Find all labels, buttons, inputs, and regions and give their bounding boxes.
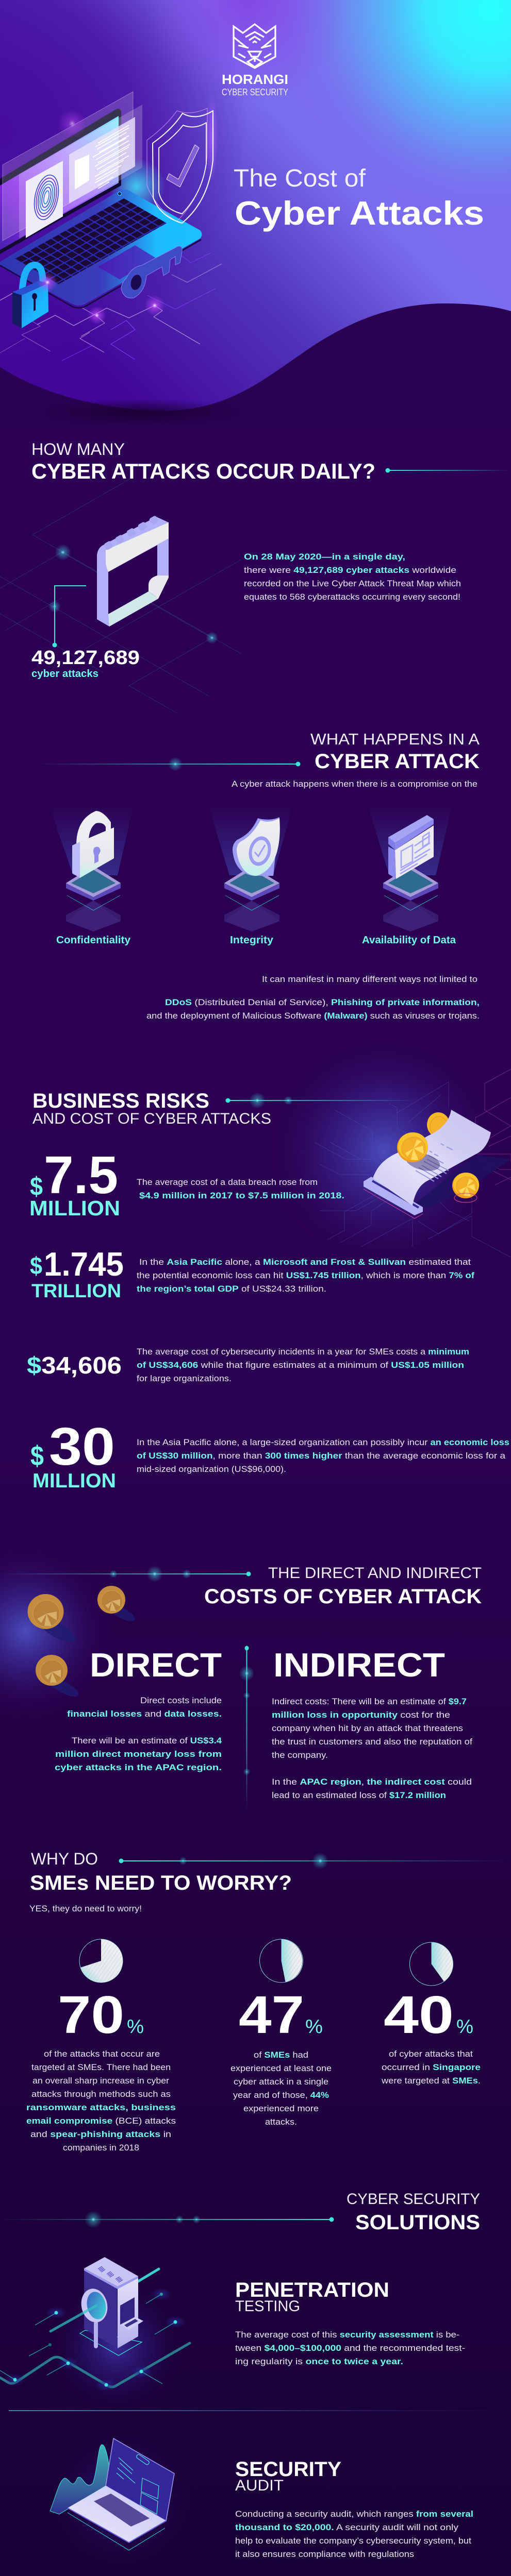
panel: why SMEs need to worry	[26, 1850, 511, 2153]
text block: of the attacks that occur are	[44, 2049, 160, 2059]
monitor	[120, 2297, 135, 2325]
text block: equates to 568 cyberattacks occurring every second!	[244, 592, 460, 602]
text block: of US$34,606 while that figure estimates at a minimum of US$1.05 million	[137, 1360, 464, 1370]
trackpad	[98, 245, 157, 279]
chart waves	[50, 2445, 109, 2514]
label: Availability of Data	[362, 935, 456, 946]
chart: 40 percent pie	[409, 1942, 453, 1986]
solution: penetration testing	[235, 2279, 465, 2366]
laptop	[0, 92, 202, 308]
text block: cyber attack in a single	[234, 2077, 328, 2087]
text block: In the Asia Pacific alone, a large-sized organization can possibly incur an economic loss	[137, 1437, 509, 1447]
label: Confidentiality	[56, 935, 131, 946]
heading: CYBER ATTACKS OCCUR DAILY?	[31, 459, 375, 483]
heading: indirect: INDIRECT	[273, 1646, 445, 1684]
heading: CYBER SECURITY	[347, 2191, 480, 2208]
magnifier	[94, 2321, 98, 2348]
laptop keyboard	[94, 2494, 150, 2527]
stat: 1.745 trillion: 1.745	[44, 1245, 124, 1283]
stat: 70 percent: %	[127, 2016, 144, 2038]
coin backdrop glow	[0, 1544, 113, 1719]
chart: 70 percent pie	[79, 1939, 123, 1982]
text block: direct: Direct costs include	[140, 1696, 222, 1705]
text block: indirect: the trust in customers and also the reputation of	[272, 1737, 472, 1747]
text block: indirect	[272, 1697, 472, 1800]
text block	[146, 974, 480, 1021]
laptop screen	[106, 2438, 174, 2521]
tagline: CYBER SECURITY	[222, 87, 288, 97]
text block: indirect: lead to an estimated loss of $17.2 million	[272, 1790, 446, 1800]
fingerprint	[30, 173, 62, 222]
stat: 30 million: $	[30, 1440, 44, 1471]
solution: security audit: it also ensures compliance with regulations	[235, 2549, 414, 2559]
stat: 1.745 trillion	[30, 1245, 124, 1301]
stat: 7.5 million: MILLION	[29, 1196, 120, 1220]
stat: 30 million	[30, 1417, 116, 1492]
icon: availability window	[368, 805, 452, 931]
heading	[310, 730, 480, 773]
panel: hero	[0, 0, 511, 428]
text block: there were 49,127,689 cyber attacks worldwide	[244, 565, 456, 575]
text block	[381, 2049, 481, 2086]
glass panes	[3, 92, 133, 241]
heading connector	[119, 1853, 511, 1869]
stat: 40 percent: 40	[384, 1985, 454, 2044]
screen	[0, 116, 119, 250]
calendar rings	[103, 515, 159, 551]
text block: attacks.	[265, 2117, 297, 2127]
key	[121, 246, 182, 298]
stat: 7.5 million: 7.5	[44, 1145, 118, 1205]
text block: of cyber attacks that	[389, 2049, 473, 2059]
stat: 1.745 trillion: TRILLION	[31, 1280, 121, 1301]
hero gradient backdrop	[0, 0, 511, 412]
illustration: receipt and coins	[364, 1110, 510, 1218]
solution: penetration testing: PENETRATION	[235, 2279, 389, 2301]
text block: mid-sized organization (US$96,000).	[137, 1464, 286, 1474]
heading: direct: DIRECT	[90, 1646, 222, 1684]
isometric background lines	[0, 479, 241, 714]
text block: indirect: In the APAC region , the indirect cost could	[272, 1777, 472, 1787]
heading: SOLUTIONS	[355, 2211, 480, 2234]
solution: security audit: SECURITY	[235, 2458, 341, 2481]
text block: In the Asia Pacific alone, a Microsoft and Frost & Sullivan estimated that	[139, 1257, 471, 1267]
chart: 47 percent pie	[260, 1939, 303, 1982]
stat: 1.745 trillion: $	[30, 1252, 42, 1279]
divider	[9, 2410, 511, 2411]
text block: the region’s total GDP of US$24.33 trillion.	[137, 1284, 326, 1294]
text block: indirect: Indirect costs: There will be an estimate of $9.7	[272, 1697, 467, 1706]
intro text: A cyber attack happens when there is a compromise on the	[232, 779, 477, 789]
heading connector	[0, 2211, 334, 2228]
plate	[80, 2330, 142, 2355]
text block: indirect: company when hit by an attack that threatens	[272, 1723, 463, 1733]
text block: indirect: million loss in opportunity cost for the	[272, 1710, 450, 1720]
wave shadow	[36, 399, 242, 426]
hero title: Cyber Attacks	[235, 194, 484, 232]
circuit lines	[0, 252, 222, 361]
heading connector	[36, 757, 300, 771]
text block: direct: cyber attacks in the APAC region.	[55, 1762, 222, 1772]
glowing nodes	[0, 2288, 186, 2391]
heading	[347, 2191, 480, 2234]
text block: It can manifest in many different ways not limited to	[262, 974, 477, 984]
heading	[31, 440, 375, 483]
wave divider	[0, 303, 511, 428]
icon: confidentiality lock	[49, 805, 134, 931]
heading	[204, 1565, 482, 1608]
server right	[118, 2277, 138, 2348]
heading: HOW MANY	[31, 440, 125, 459]
illustration: laptop with charts	[50, 2429, 191, 2568]
text block: $4.9 million in 2017 to $7.5 million in 2018.	[139, 1191, 344, 1200]
text block: occurred in Singapore	[382, 2062, 481, 2072]
text block: the potential economic loss can hit US$1.745 trillion , which is more than 7% of	[137, 1270, 474, 1280]
text block: DDoS (Distributed Denial of Service), Phishing of private information,	[165, 997, 480, 1007]
vertical divider	[239, 1646, 255, 1811]
sparkles	[37, 109, 165, 325]
solution: security audit	[235, 2458, 473, 2559]
solution: penetration testing: ing regularity is once to twice a year.	[235, 2357, 403, 2366]
server front	[84, 2270, 117, 2348]
solution: penetration testing: The average cost of this security assessment is be-	[235, 2330, 459, 2340]
stat: 30 million: 30	[49, 1417, 115, 1476]
coin small right	[452, 1173, 479, 1202]
stat: 34,606: $34,606	[27, 1352, 122, 1379]
text block: direct: financial losses and data losses.	[67, 1709, 222, 1719]
text block: of SMEs had	[254, 2050, 308, 2060]
stat: 30 million: MILLION	[32, 1470, 116, 1492]
text block: companies in 2018	[63, 2143, 139, 2153]
padlock	[12, 265, 48, 328]
stat: 49,127,689	[31, 647, 140, 680]
text block: year and of those, 44%	[233, 2090, 329, 2100]
text block: indirect: the company.	[272, 1750, 328, 1760]
coin large	[397, 1132, 428, 1162]
label: Integrity	[230, 935, 274, 946]
stat: 49,127,689: cyber attacks	[31, 668, 98, 680]
stat: 70 percent	[58, 1985, 144, 2044]
text block: were targeted at SMEs.	[381, 2076, 481, 2086]
stat: 47 percent: 47	[239, 1985, 304, 2044]
page text lines	[93, 125, 130, 189]
text block: On 28 May 2020—in a single day,	[244, 552, 405, 562]
tiger head mark	[234, 24, 275, 68]
circuit wire	[0, 2343, 190, 2387]
text block: experienced at least one	[230, 2063, 332, 2073]
illustration glow	[266, 1033, 503, 1270]
coins	[28, 1586, 137, 1700]
wordmark: HORANGI	[222, 72, 288, 87]
logo	[222, 24, 288, 97]
stat: 70 percent: 70	[58, 1985, 124, 2044]
text block: attacks through methods such as	[31, 2089, 171, 2099]
receipt text	[416, 1144, 453, 1181]
sparkles	[48, 544, 218, 644]
heading: WHAT HAPPENS IN A	[310, 730, 480, 748]
heading: WHY DO	[31, 1850, 98, 1868]
stat: 7.5 million	[29, 1145, 120, 1220]
holographic shield	[147, 108, 213, 223]
heading: COSTS OF CYBER ATTACK	[204, 1585, 482, 1608]
subheading: YES, they do need to worry!	[29, 1904, 142, 1913]
text block: an overall sharp increase in cyber	[32, 2076, 169, 2086]
text block	[244, 552, 461, 602]
text block: direct: million direct monetary loss from	[55, 1749, 222, 1759]
panel: direct and indirect costs	[0, 1544, 482, 1811]
hero title	[234, 165, 484, 232]
heading: AND COST OF CYBER ATTACKS	[32, 1110, 271, 1127]
text block: direct: There will be an estimate of US$3.4	[72, 1736, 222, 1745]
text block: email compromise (BCE) attacks	[26, 2116, 176, 2126]
text block	[26, 2049, 176, 2153]
panel: solutions	[0, 2191, 511, 2576]
panel: what happens	[36, 730, 480, 1021]
stat: 40 percent: %	[456, 2016, 473, 2038]
solution: security audit: help to evaluate the company’s cybersecurity system, but	[235, 2536, 471, 2546]
text block: The average cost of cybersecurity incidents in a year for SMEs costs a minimum	[137, 1347, 469, 1357]
right page panel	[69, 117, 135, 204]
screen content	[117, 2454, 159, 2514]
stat: 7.5 million: $	[30, 1172, 43, 1201]
cyan back glow	[108, 158, 165, 215]
icon: calendar	[97, 515, 169, 626]
illustration: server and magnifier	[0, 2257, 190, 2414]
stat: 47 percent: %	[305, 2016, 323, 2038]
fingerprint page	[26, 161, 63, 238]
solution: security audit: AUDIT	[235, 2477, 284, 2494]
heading connector	[0, 1566, 251, 1582]
laptop base	[68, 2486, 166, 2543]
server top	[84, 2257, 138, 2286]
stat: 40 percent	[384, 1985, 473, 2044]
panel: business risks	[27, 1033, 511, 1492]
solution: security audit: thousand to $20,000. A security audit will not only	[235, 2522, 459, 2532]
laptop base	[0, 190, 202, 306]
glow	[52, 2429, 191, 2568]
heading: BUSINESS RISKS	[32, 1090, 209, 1112]
hero title: The Cost of	[234, 165, 366, 192]
text block	[137, 1177, 344, 1200]
text block: for large organizations.	[137, 1374, 232, 1383]
text block	[137, 1257, 474, 1294]
solution: security audit: Conducting a security audit, which ranges from several	[235, 2509, 473, 2519]
heading	[32, 1090, 271, 1127]
text block: The average cost of a data breach rose from	[137, 1177, 318, 1187]
icon: integrity shield	[208, 805, 293, 931]
text block: direct	[55, 1696, 222, 1772]
text block	[230, 2050, 332, 2127]
panel: cyber attacks daily	[0, 399, 511, 714]
text block: and spear-phishing attacks in	[30, 2129, 171, 2139]
heading	[30, 1850, 292, 1894]
vents	[98, 2266, 123, 2282]
keyboard	[14, 198, 167, 284]
solution: penetration testing: TESTING	[235, 2298, 300, 2315]
text block	[137, 1347, 469, 1383]
heading: THE DIRECT AND INDIRECT	[268, 1565, 482, 1582]
screen bezel	[0, 109, 121, 254]
heading connector	[386, 468, 511, 473]
text block: and the deployment of Malicious Software (Malware) such as viruses or trojans.	[146, 1011, 480, 1021]
heading: SMEs NEED TO WORRY?	[30, 1872, 292, 1894]
vertical light streak	[206, 93, 218, 180]
text block: targeted at SMEs. There had been	[31, 2062, 171, 2072]
solution: penetration testing: tween $4,000–$100,000 and the recommended test-	[235, 2343, 465, 2353]
text block: experienced more	[243, 2104, 319, 2113]
text block: recorded on the Live Cyber Attack Threat Map which	[244, 579, 461, 588]
plate	[68, 2513, 165, 2550]
teal rods	[138, 2269, 159, 2281]
heading connector	[226, 1092, 417, 1109]
stat: 49,127,689: 49,127,689	[31, 647, 140, 669]
text block	[137, 1437, 509, 1474]
callout connector	[53, 586, 86, 647]
text block: of US$30 million , more than 300 times higher than the average economic loss for a	[137, 1451, 506, 1461]
text block: ransomware attacks, business	[26, 2103, 176, 2112]
glow	[49, 2280, 183, 2414]
heading: CYBER ATTACK	[315, 750, 480, 773]
circuit background	[315, 1069, 511, 1257]
camera dot	[118, 192, 122, 196]
